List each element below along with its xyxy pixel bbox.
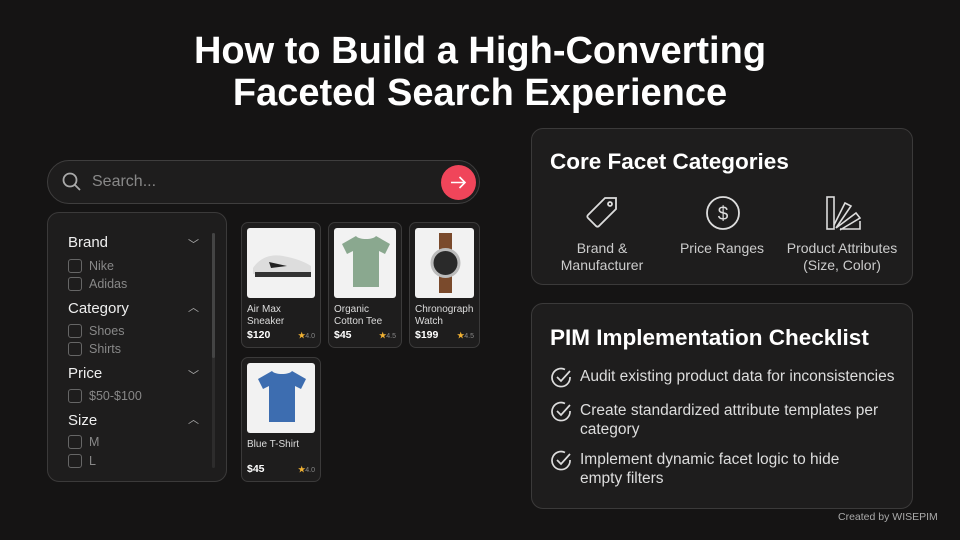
product card: watch: ★4.5 [457, 331, 474, 340]
product card: watch: Watch [415, 316, 443, 327]
item: price: Price Ranges [680, 240, 764, 256]
panel: filters: Shirts [89, 342, 121, 356]
icon: search [62, 172, 80, 191]
icon: submit arrow [441, 165, 476, 200]
product card: watch: Chronograph [415, 304, 473, 315]
panel: filters: ﹀ [188, 370, 199, 382]
panel: filters: Brand [68, 234, 108, 251]
heading: Core Facet Categories [550, 149, 789, 174]
product card: tee: ★4.5 [379, 331, 396, 340]
icon: tag [586, 197, 617, 228]
product card: sneaker: ★4.0 [298, 331, 315, 340]
panel: filters: L [89, 454, 96, 468]
search bar [47, 160, 480, 204]
product card: tee: Organic [334, 304, 369, 315]
credit: Created by WISEPIM [838, 511, 938, 523]
title: How to Build a High-Converting [194, 30, 766, 72]
panel: filters: Size [68, 412, 97, 429]
product card: blue tee: $45 [247, 463, 265, 475]
panel: filters: Category [68, 300, 129, 317]
panel: filters: ︿ [188, 414, 199, 426]
product card: watch: $199 [415, 329, 438, 341]
product card: tee [328, 222, 402, 348]
search placeholder: Search... [92, 173, 156, 190]
checklist item 2 [551, 402, 878, 438]
panel: core facet categories [531, 128, 913, 285]
panel: filters: Adidas [89, 277, 127, 291]
checklist item 2: category [580, 421, 639, 438]
panel: filters: ︿ [188, 302, 199, 314]
panel: filters [47, 212, 227, 482]
icon: dollar [706, 196, 740, 230]
title: Faceted Search Experience [233, 72, 727, 114]
icon: swatches [826, 196, 861, 231]
checklist item 1: Audit existing product data for inconsistencies [580, 368, 894, 385]
item: brand [561, 240, 644, 273]
product card: sneaker: Air Max [247, 304, 281, 315]
product card: blue tee [241, 357, 321, 482]
checklist item 2: Create standardized attribute templates per [580, 402, 878, 419]
panel: filters: ﹀ [188, 239, 199, 251]
heading: PIM Implementation Checklist [550, 325, 869, 350]
product card: watch [409, 222, 480, 348]
product card: blue tee: ★4.0 [298, 465, 315, 474]
checklist item 3: empty filters [580, 470, 664, 487]
title [194, 30, 766, 114]
checklist item 3: Implement dynamic facet logic to hide [580, 451, 839, 468]
product card: tee: Cotton Tee [334, 316, 382, 327]
panel: filters: Shoes [89, 324, 124, 338]
item: brand: Brand & [577, 240, 627, 256]
product card: sneaker [241, 222, 321, 348]
item: attributes [787, 240, 897, 273]
panel: filters: M [89, 435, 99, 449]
item: attributes: Product Attributes [787, 240, 897, 256]
product card: tee: $45 [334, 329, 352, 341]
checklist item 3 [551, 450, 839, 487]
panel: PIM checklist [531, 303, 913, 509]
item: brand: Manufacturer [561, 257, 643, 273]
panel: filters: $50-$100 [89, 389, 142, 403]
icon: dollar: $ [718, 204, 729, 225]
panel: filters: Nike [89, 259, 114, 273]
product card: sneaker: $120 [247, 329, 270, 341]
item: attributes: (Size, Color) [803, 257, 881, 273]
product card: sneaker: Sneaker [247, 316, 284, 327]
product card: blue tee: Blue T-Shirt [247, 439, 299, 450]
panel: filters: Price [68, 365, 102, 382]
